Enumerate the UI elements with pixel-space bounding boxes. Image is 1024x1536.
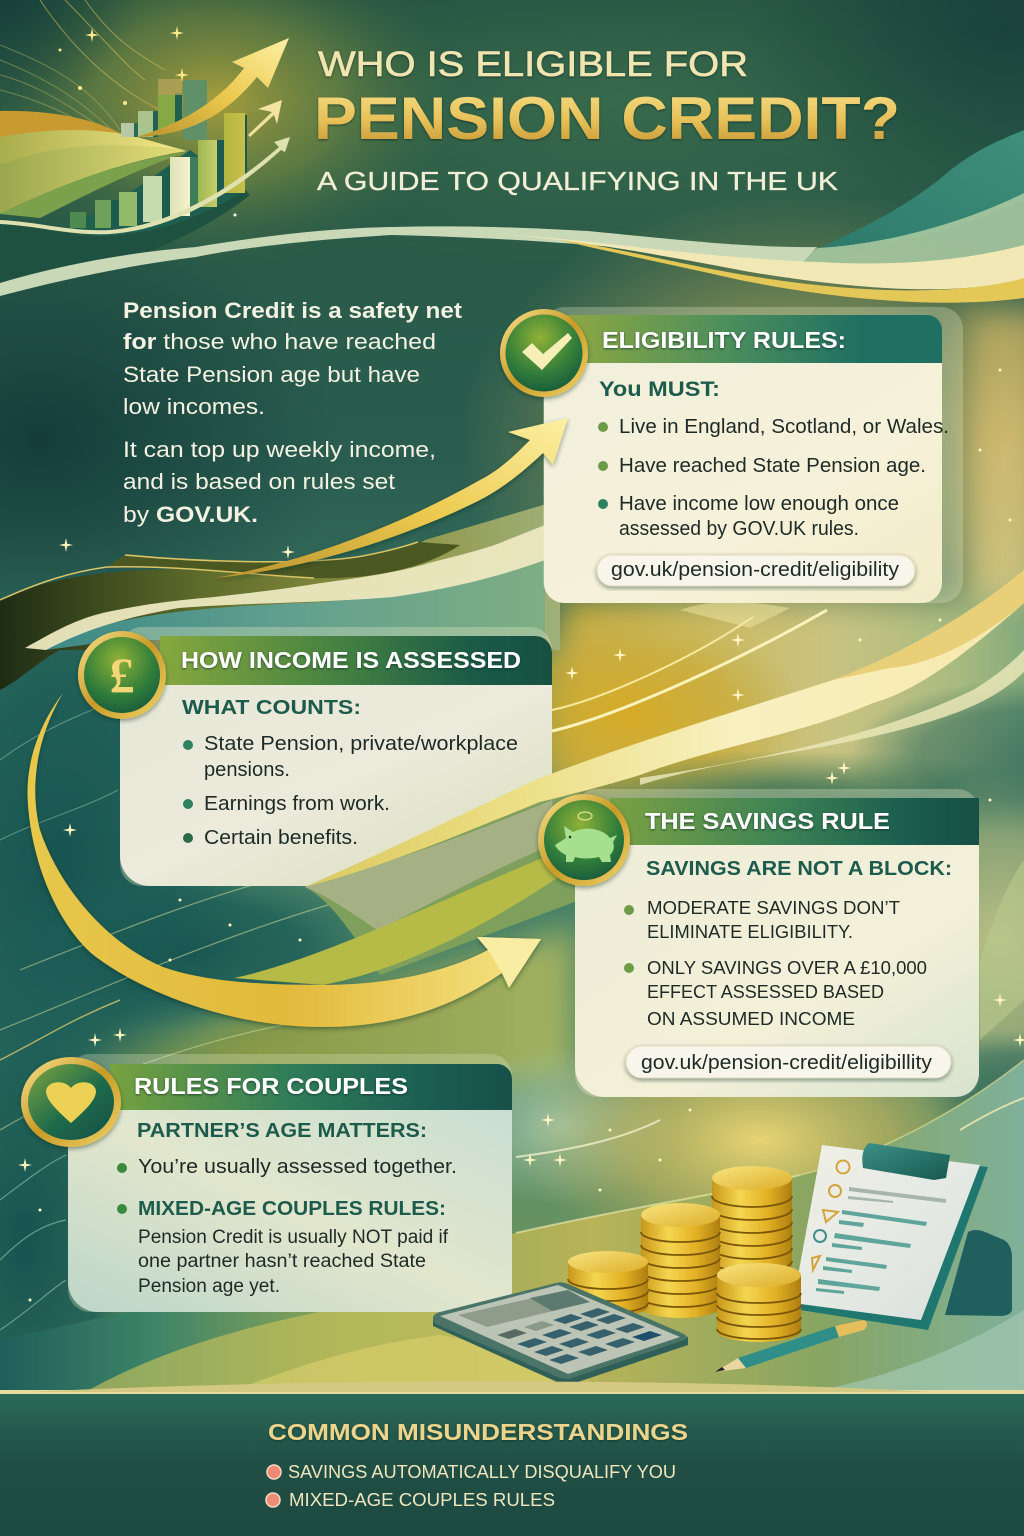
link pill: gov.uk/pension-credit/eligibillity bbox=[641, 1052, 932, 1074]
dark base wave bbox=[0, 185, 250, 292]
header chart illustration bbox=[0, 0, 290, 292]
icon: pen bbox=[715, 1320, 867, 1372]
bullet list bbox=[117, 1156, 457, 1297]
link pill: gov.uk/pension-credit/eligibility bbox=[611, 559, 899, 581]
footer list: SAVINGS AUTOMATICALLY DISQUALIFY YOU bbox=[288, 1462, 676, 1482]
footer list: MIXED-AGE COUPLES RULES bbox=[289, 1490, 555, 1510]
link pill bbox=[597, 555, 915, 586]
intro text: It can top up weekly income, bbox=[123, 437, 436, 462]
bullet list: Certain benefits. bbox=[204, 827, 358, 849]
cream ribbon over strip bbox=[25, 525, 545, 650]
bullet list: Pension Credit is usually NOT paid if bbox=[138, 1227, 449, 1248]
title bbox=[314, 45, 900, 196]
panel: rules for couples bbox=[21, 1054, 512, 1312]
panel: how income is assessed bbox=[78, 627, 552, 886]
pale band behind lower-right bbox=[980, 860, 1024, 1040]
bullet list: pensions. bbox=[204, 759, 290, 781]
olive swell below the swoosh bbox=[60, 925, 575, 1085]
intro text: State Pension age but have bbox=[123, 362, 420, 387]
rising gold arrow bbox=[137, 38, 289, 137]
green underlay bbox=[305, 768, 580, 975]
stars and sparkle dots bbox=[18, 368, 1024, 1302]
bullet list: Earnings from work. bbox=[204, 793, 390, 815]
bullet list: You’re usually assessed together. bbox=[138, 1156, 457, 1178]
heading: THE SAVINGS RULE bbox=[645, 808, 890, 834]
intro text: Pension Credit is a safety net bbox=[123, 298, 463, 323]
main cream sweep bbox=[305, 570, 1024, 887]
panel: eligibility rules bbox=[500, 307, 963, 603]
heading: HOW INCOME IS ASSESSED bbox=[181, 647, 521, 673]
bullet list: one partner hasn’t reached State bbox=[138, 1251, 426, 1272]
fine net lines bbox=[0, 45, 120, 130]
title line 2: PENSION CREDIT? bbox=[314, 85, 900, 152]
bullet list: Have income low enough once bbox=[619, 493, 899, 515]
heading: RULES FOR COUPLES bbox=[134, 1073, 408, 1099]
teal behind bars bbox=[60, 150, 245, 236]
small arrow bbox=[248, 100, 282, 137]
heading: ELIGIBILITY RULES: bbox=[602, 327, 846, 353]
gold leaf waves bbox=[0, 111, 120, 142]
second pale band bbox=[640, 650, 1024, 785]
subheading: You MUST: bbox=[599, 378, 720, 401]
panel: common misunderstandings footer bbox=[0, 1382, 1024, 1536]
sparks bbox=[58, 26, 189, 105]
upper bars bbox=[121, 123, 134, 137]
bullet list bbox=[624, 897, 927, 1029]
illustration: calculator, coins, clipboard and pen bbox=[433, 1143, 1012, 1386]
bullet list: Pension age yet. bbox=[138, 1276, 280, 1297]
bullet list: ON ASSUMED INCOME bbox=[647, 1008, 855, 1029]
subtitle: A GUIDE TO QUALIFYING IN THE UK bbox=[317, 166, 839, 196]
header wave ribbons bbox=[0, 130, 1024, 303]
grey-green sheen bbox=[305, 800, 558, 930]
bullet list bbox=[183, 733, 518, 849]
bullet list: State Pension, private/workplace bbox=[204, 733, 518, 755]
panel: the savings rule bbox=[538, 789, 979, 1097]
intro text bbox=[123, 298, 463, 527]
gold lines above ribbon bbox=[0, 542, 418, 600]
icon: coin stacks bbox=[568, 1166, 801, 1342]
ribbon bands crossing the income panel bbox=[234, 570, 1024, 985]
bullet list: ONLY SAVINGS OVER A £10,000 bbox=[647, 957, 927, 978]
bullet list: ELIMINATE ELIGIBILITY. bbox=[647, 921, 853, 942]
lower bars bbox=[70, 212, 86, 228]
icon: heart badge bbox=[21, 1057, 121, 1147]
icon: checkmark badge bbox=[500, 309, 588, 397]
subheading: PARTNER’S AGE MATTERS: bbox=[137, 1120, 427, 1142]
bullet list: Have reached State Pension age. bbox=[619, 455, 926, 477]
bullet list: assessed by GOV.UK rules. bbox=[619, 518, 859, 540]
intro text: for those who have reached bbox=[123, 329, 436, 354]
bullet list bbox=[598, 416, 949, 540]
intro text: by GOV.UK. bbox=[123, 502, 258, 527]
gold lines through mid panel gap bbox=[552, 617, 753, 710]
arrow: up to eligibility panel bbox=[215, 418, 568, 578]
subheading: SAVINGS ARE NOT A BLOCK: bbox=[646, 858, 952, 880]
footer list bbox=[266, 1462, 676, 1510]
link pill bbox=[626, 1046, 951, 1078]
yellow-olive band bbox=[234, 848, 566, 985]
icon: clipboard bbox=[793, 1143, 988, 1330]
bullet list: MIXED-AGE COUPLES RULES: bbox=[138, 1198, 446, 1220]
bullet list: MODERATE SAVINGS DON’T bbox=[647, 897, 900, 918]
icon: calculator bbox=[433, 1282, 688, 1386]
thin curved arrow bbox=[0, 137, 290, 234]
bullet list: EFFECT ASSESSED BASED bbox=[647, 981, 884, 1002]
lower ground sweep bbox=[0, 1060, 1024, 1392]
teal strip under ribbon bbox=[46, 550, 545, 650]
intro text: and is based on rules set bbox=[123, 469, 395, 494]
thin sweeping lines bbox=[0, 870, 380, 1130]
bullet list: Live in England, Scotland, or Wales. bbox=[619, 416, 949, 438]
dark band between gold lines bbox=[107, 542, 460, 578]
dark olive swell under intro bbox=[0, 500, 560, 690]
icon: piggy bank badge bbox=[538, 794, 630, 886]
arrow: big swoosh to savings panel bbox=[27, 693, 541, 1027]
title line 1: WHO IS ELIGIBLE FOR bbox=[318, 45, 748, 84]
icon: binder block bbox=[945, 1230, 1012, 1316]
intro text: low incomes. bbox=[123, 394, 265, 419]
subheading: WHAT COUNTS: bbox=[182, 697, 361, 719]
icon: pound badge bbox=[78, 631, 166, 719]
icon: pound badge: £ bbox=[110, 647, 134, 703]
footer heading: COMMON MISUNDERSTANDINGS bbox=[268, 1419, 688, 1445]
